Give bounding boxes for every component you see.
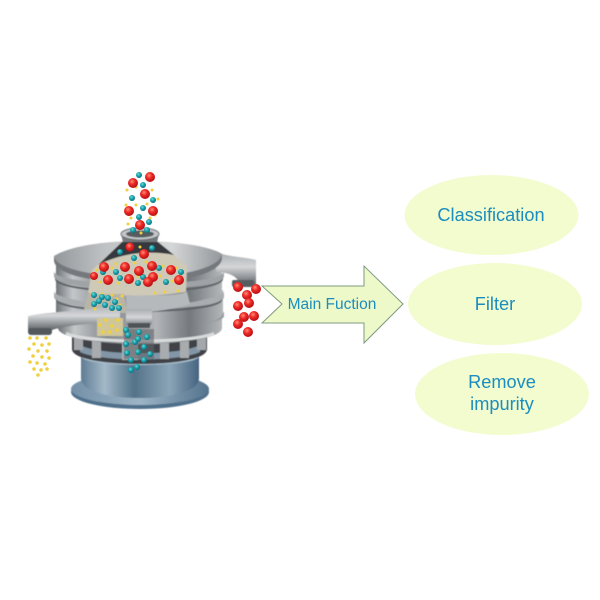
middle sieve tier [54,290,224,330]
feed inlet collar [121,228,159,243]
right discharge spout [216,252,256,287]
centre outlet pipe [124,309,154,359]
dome lid [54,241,222,283]
main function arrow [262,266,403,343]
spring and leg section [72,334,207,364]
function oval: remove impurity: Remove [468,372,536,392]
function oval: filter: Filter [475,294,515,314]
yellow fine particles [27,186,180,377]
cutaway middle chamber [83,294,128,313]
teal medium particles [91,172,184,373]
red coarse particles [90,172,261,337]
function oval: classification [404,175,578,255]
function oval: classification: Classification [437,205,545,225]
lower sieve tier [56,311,224,344]
function oval: remove impurity: impurity [470,394,535,414]
main function arrow: Main Fuction [288,296,376,313]
upper sieve tier [54,256,224,306]
function oval: remove impurity [415,353,589,435]
cutaway upper chamber [88,242,187,296]
vibrating sieve machine illustration [28,228,256,409]
lower outlet duct [126,292,190,313]
machine base cylinder [71,350,209,409]
function oval: filter [408,263,582,345]
left discharge spout [28,304,123,336]
